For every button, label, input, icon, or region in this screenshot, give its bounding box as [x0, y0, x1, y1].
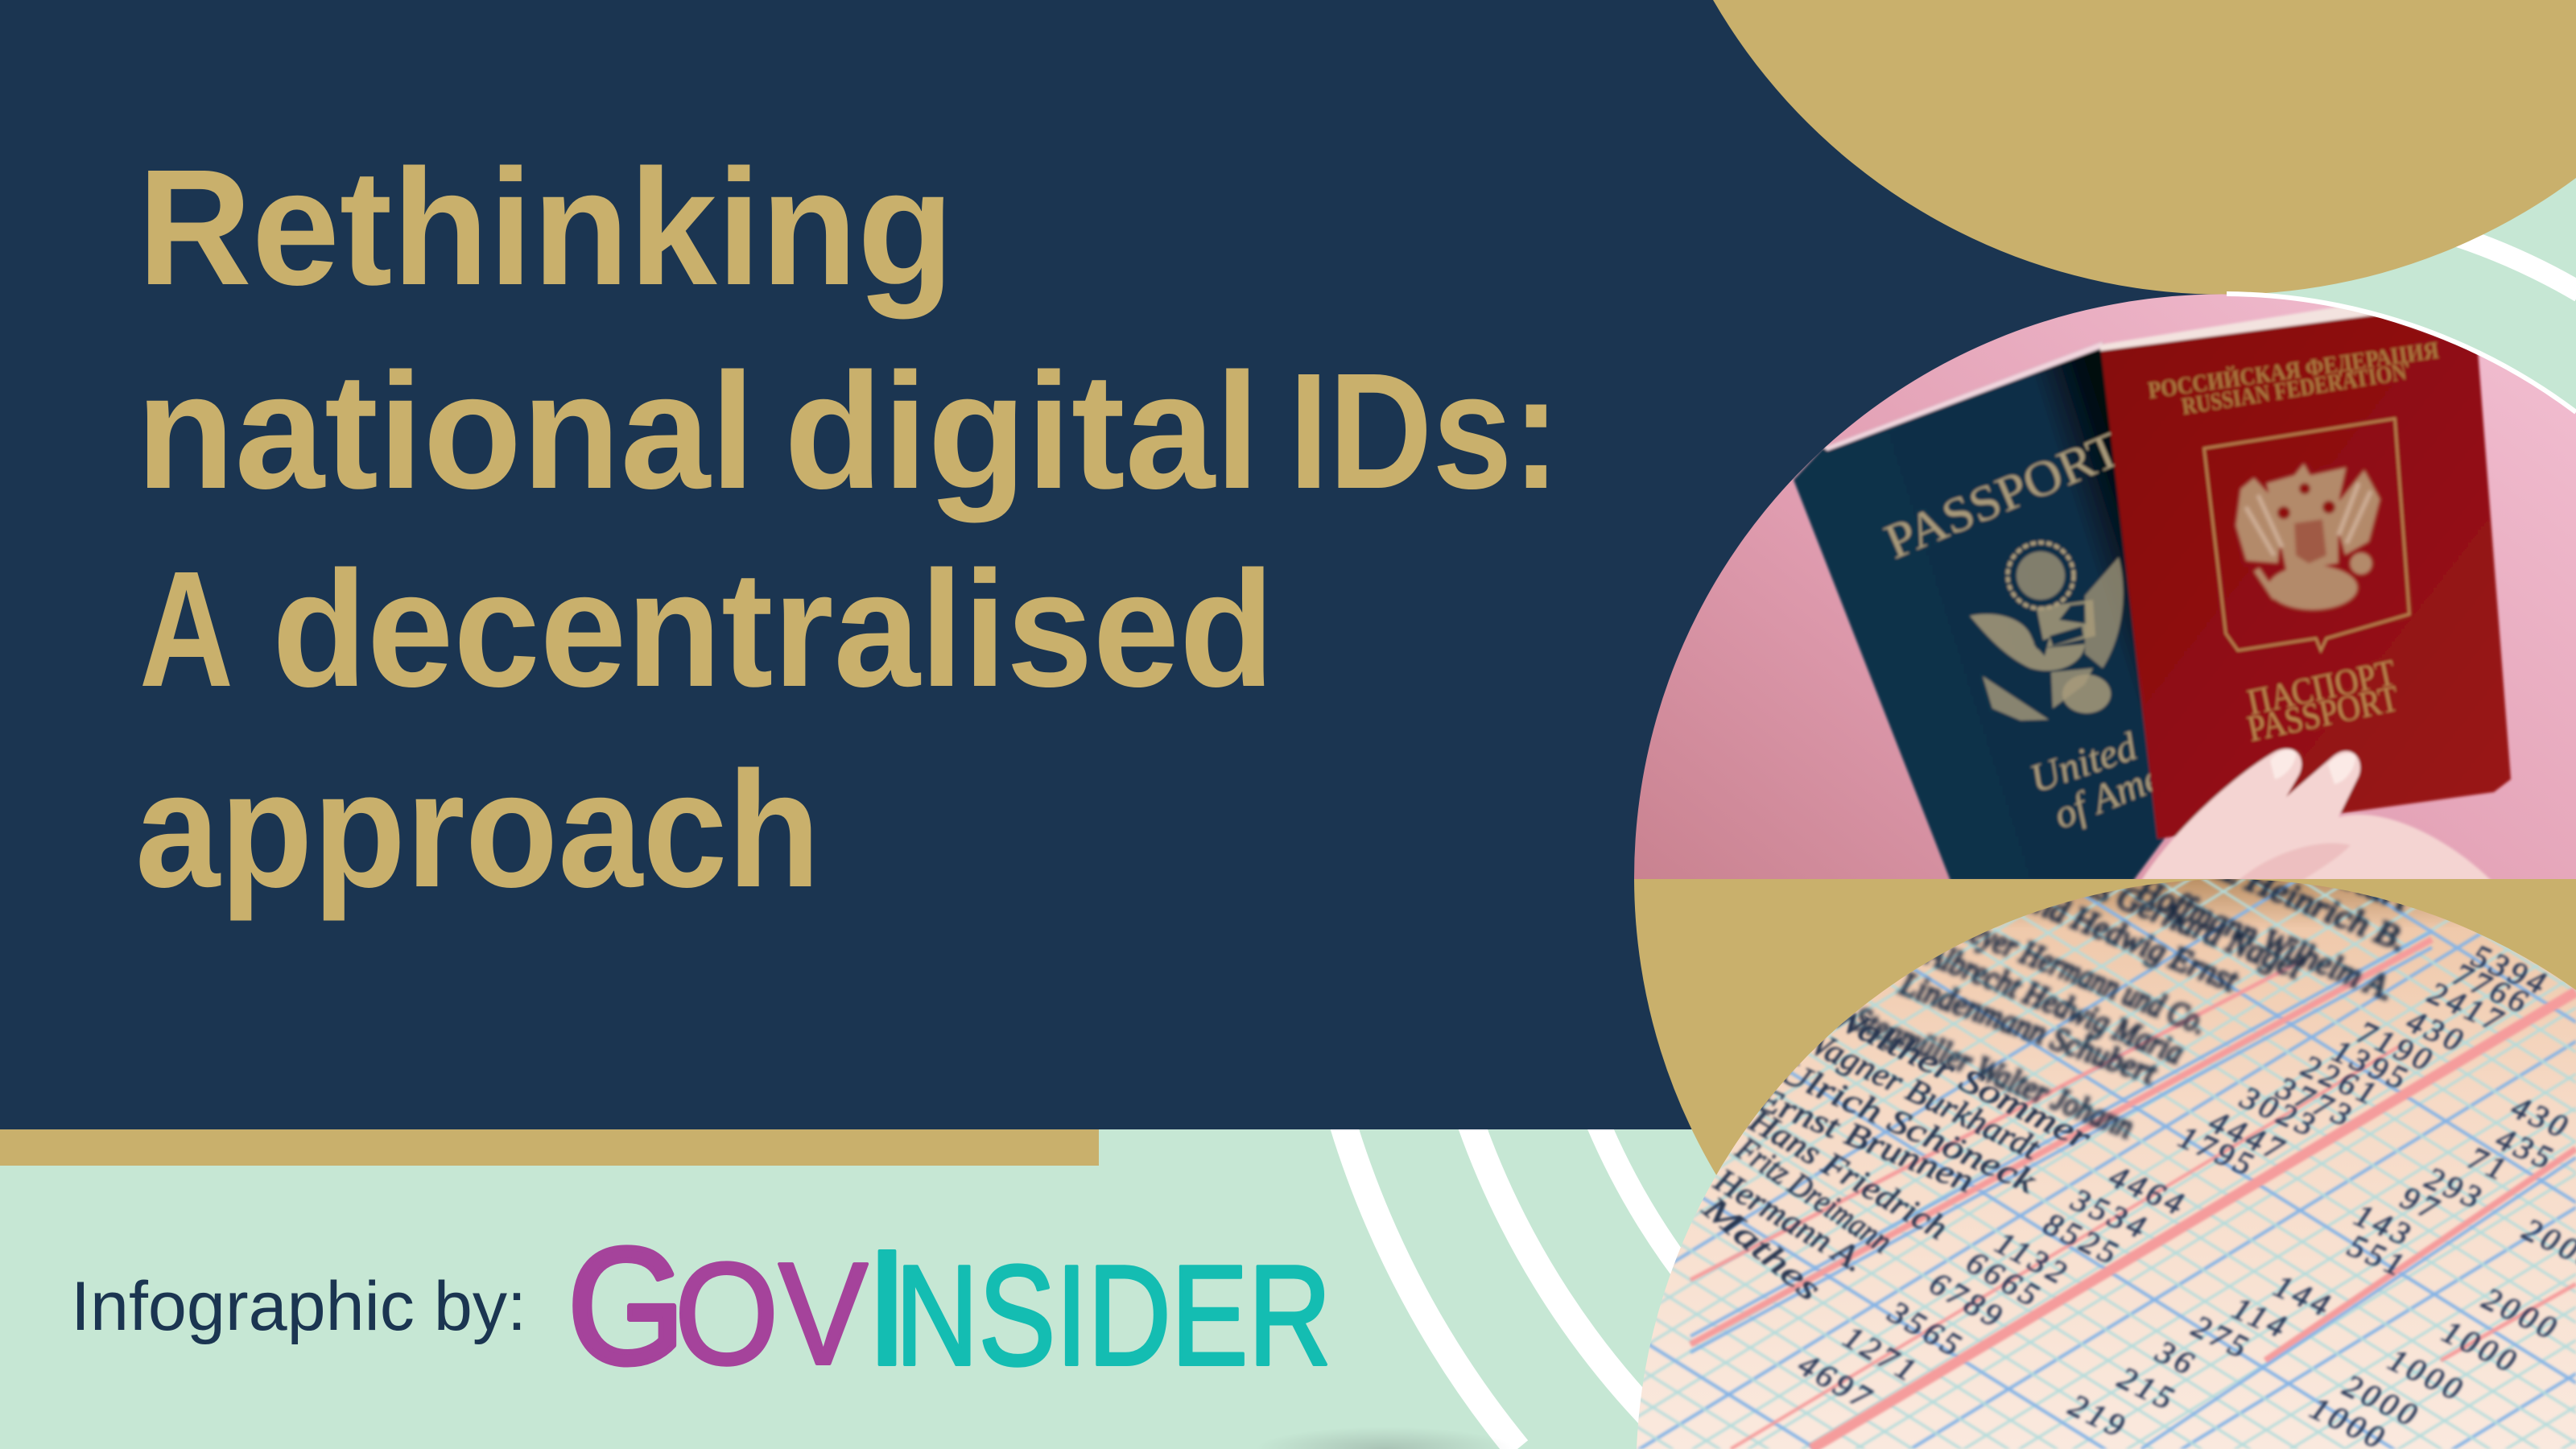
- photo: passports: [1634, 290, 2576, 881]
- byline text: Infographic by:: [71, 1268, 526, 1345]
- ledger handwritten numbers: 3565: [1882, 1293, 1971, 1365]
- GovInsider logo: G: [568, 1214, 685, 1398]
- ledger handwritten numbers: 1795: [2174, 1118, 2262, 1184]
- navy US passport: United States: [2024, 688, 2243, 801]
- ledger handwritten numbers: 4464: [2104, 1158, 2193, 1224]
- ledger handwritten numbers: 215: [2112, 1359, 2182, 1418]
- photo: ledger: [1637, 879, 2576, 1449]
- red Russian passport: PASSPORT: [2244, 677, 2402, 749]
- gold circle behind ledger: [1634, 879, 2576, 1208]
- ledger handwritten names: Hermann A.: [1707, 1162, 1871, 1280]
- ledger handwritten numbers: 3534: [2066, 1181, 2155, 1247]
- ledger handwritten numbers: 293: [2420, 1159, 2490, 1217]
- GovInsider logo: NSIDER: [895, 1236, 1331, 1395]
- ledger handwritten numbers: 430: [2506, 1088, 2576, 1146]
- ledger handwritten numbers: 1132: [1990, 1224, 2075, 1293]
- ledger handwritten names top out of focus: Hans Gerhard Nagel: [2039, 849, 2308, 987]
- ledger handwritten names top out of focus: Hoffmann Wilhelm A.: [2131, 871, 2400, 1009]
- red Russian passport: ПАСПОРТ: [2244, 651, 2399, 723]
- ledger handwritten names top out of focus: Meyer Hermann und Co.: [1944, 905, 2212, 1042]
- ledger handwritten names: Fritz Dreimann: [1729, 1130, 1898, 1261]
- GovInsider logo: OV: [675, 1233, 868, 1395]
- navy US passport: [1792, 341, 2166, 879]
- ledger handwritten numbers: 6665: [1961, 1244, 2049, 1315]
- ledger handwritten numbers: 3773: [2271, 1069, 2360, 1135]
- ledger red rulings: [1690, 931, 2576, 1449]
- title: A: [139, 537, 233, 721]
- ledger handwritten names: Hans Friedrich: [1742, 1101, 1954, 1248]
- ledger handwritten numbers: 5394: [2467, 937, 2555, 1003]
- ledger handwritten numbers: 2000: [2338, 1367, 2426, 1435]
- navy US passport: of America: [2047, 729, 2228, 837]
- ledger handwritten numbers: 3023: [2235, 1079, 2324, 1145]
- ledger handwritten names top out of focus: Albrecht Hedwig Maria: [1919, 935, 2189, 1072]
- ledger handwritten numbers: 2000: [2477, 1280, 2566, 1348]
- red Russian passport: РОССИЙСКАЯ ФЕДЕРАЦИЯ: [2146, 337, 2441, 404]
- red Russian passport: RUSSIAN FEDERATION: [2180, 358, 2409, 420]
- ledger handwritten numbers: 219: [2063, 1386, 2133, 1446]
- title: digital: [784, 339, 1260, 523]
- ledger handwritten numbers: 36: [2150, 1332, 2202, 1383]
- photo rim white: [2227, 294, 2576, 412]
- ledger handwritten numbers: [1793, 937, 2576, 1449]
- ledger handwritten numbers: 430: [2401, 1002, 2471, 1060]
- gold circle top right: [1713, 0, 2576, 295]
- ledger handwritten names: Ulrich Schöneck: [1773, 1052, 2041, 1201]
- ledger handwritten names top out of focus: Becker Ernst Karl: [2147, 782, 2415, 919]
- navy US passport: PASSPORT: [1877, 421, 2130, 570]
- ledger handwritten names: Ernst Brunnen: [1751, 1080, 1979, 1200]
- ledger handwritten names: Mathes: [1695, 1189, 1827, 1308]
- ledger handwritten numbers: 97: [2396, 1179, 2447, 1228]
- ledger handwritten numbers: 1271: [1838, 1319, 1926, 1390]
- ledger handwritten names top out of focus: Lindenmann Schubert: [1895, 965, 2161, 1092]
- ledger handwritten names top out of focus: Stegmüller Walter Johann: [1848, 1001, 2139, 1146]
- hand holding passports: [2141, 749, 2491, 881]
- ledger handwritten numbers: 143: [2349, 1196, 2419, 1254]
- ledger handwritten names top out of focus: Schulz Heinrich B.: [2145, 823, 2413, 960]
- shield outline: [2204, 419, 2409, 650]
- ledger handwritten numbers: 551: [2343, 1227, 2413, 1285]
- ledger handwritten numbers: 7766: [2448, 956, 2537, 1022]
- ledger handwritten numbers: 1000: [2383, 1341, 2471, 1409]
- ledger handwritten numbers: 435: [2491, 1120, 2561, 1178]
- title: [135, 135, 1560, 922]
- decorative white arcs lower: [1343, 1123, 1771, 1449]
- gold accent bar: [0, 1129, 1099, 1166]
- title: IDs:: [1289, 339, 1560, 523]
- ledger handwritten numbers: 144: [2268, 1267, 2339, 1325]
- ledger handwritten names top out of focus: Roland Hedwig Ernst: [1974, 862, 2244, 1000]
- photo background pink: [1634, 290, 2576, 881]
- title: approach: [135, 737, 820, 922]
- ledger handwritten numbers: 8525: [2038, 1205, 2127, 1273]
- ledger handwritten numbers: 2417: [2423, 974, 2512, 1040]
- navy title panel: [0, 0, 2227, 1129]
- decorative white arc upper right: [2375, 215, 2576, 292]
- ledger handwritten numbers: 71: [2463, 1139, 2515, 1189]
- ledger handwritten numbers: 2261: [2297, 1047, 2385, 1113]
- ledger paper: [1634, 877, 2576, 1449]
- ledger handwritten names top out of focus: [1852, 879, 2407, 1142]
- ledger handwritten numbers: 1395: [2327, 1032, 2416, 1098]
- title: national: [136, 339, 755, 523]
- ledger handwritten numbers: 114: [2227, 1290, 2295, 1346]
- ledger handwritten numbers: 6789: [1924, 1265, 2012, 1336]
- ledger handwritten names: Walther Sommer: [1824, 997, 2096, 1158]
- GovInsider logo: [568, 1214, 1331, 1400]
- US eagle emblem: [1970, 543, 2123, 720]
- ledger handwritten names: Wagner Burkhardt: [1796, 1021, 2046, 1168]
- title: decentralised: [272, 537, 1274, 721]
- ledger handwritten numbers: 4697: [1793, 1346, 1880, 1418]
- ledger handwritten names: [1695, 997, 2096, 1308]
- GovInsider logo: I: [865, 1216, 910, 1400]
- ledger handwritten numbers: 275: [2186, 1307, 2256, 1367]
- soft shadow at the bottom edge: [1256, 1405, 1513, 1449]
- ledger handwritten numbers: 7190: [2352, 1013, 2441, 1080]
- ledger blue grid: [1634, 877, 2576, 1449]
- Russian eagle emblem: [2235, 463, 2380, 610]
- red Russian passport: [2100, 304, 2511, 839]
- ledger handwritten numbers: 1000: [2437, 1313, 2525, 1381]
- ledger handwritten numbers: 4447: [2204, 1103, 2293, 1169]
- title: Rethinking: [138, 135, 954, 320]
